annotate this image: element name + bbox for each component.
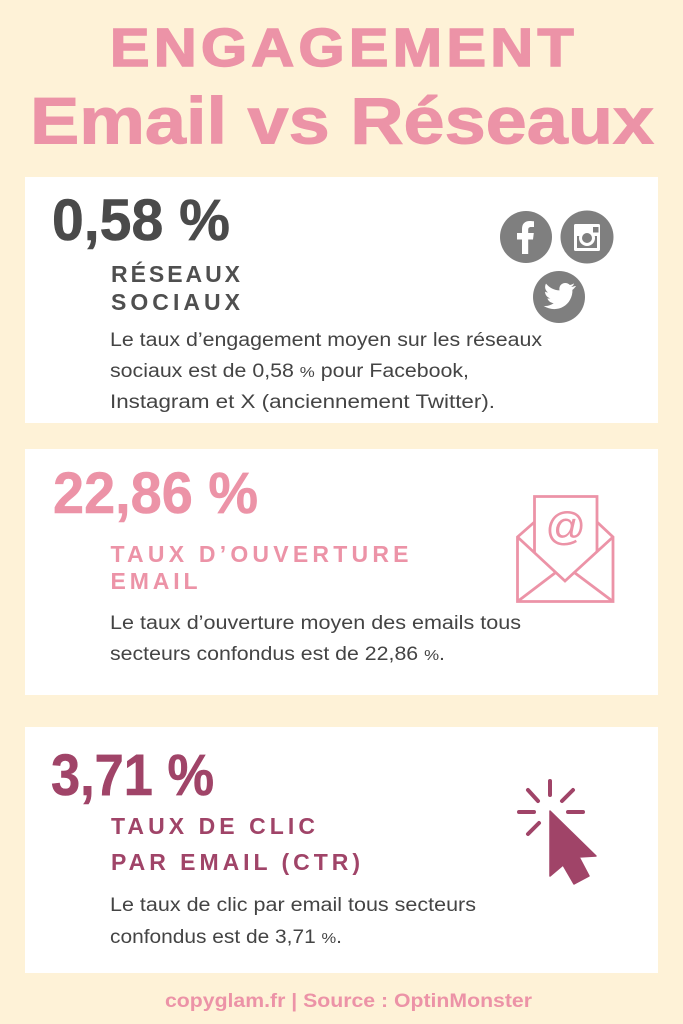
title: Email vs Réseaux <box>30 84 654 158</box>
text block: social description <box>110 330 543 413</box>
icon: envelope: @ <box>545 505 585 549</box>
stat: 0,58 %: 0,58 % <box>52 188 230 253</box>
heading: taux de clic par email <box>111 813 360 875</box>
heading: taux de clic par email: TAUX DE CLIC <box>111 813 315 839</box>
heading: taux d'ouverture email <box>110 541 408 594</box>
text block: click rate description: confondus est de 3,71 %. <box>110 927 342 948</box>
icon: envelope <box>518 496 613 602</box>
text block: click rate description <box>110 895 476 948</box>
panel: social networks <box>25 177 658 423</box>
icon: twitter <box>533 271 585 323</box>
title: ENGAGEMENT <box>110 18 578 78</box>
heading: réseaux sociaux <box>111 260 241 315</box>
text block: click rate description: Le taux de clic par email tous secteurs <box>110 895 476 916</box>
text block: open rate description: Le taux d’ouverture moyen des emails tous <box>110 613 521 634</box>
icon: cursor <box>519 781 596 884</box>
icon: instagram <box>560 210 614 264</box>
text block: open rate description <box>110 613 521 665</box>
text block: social description: Le taux d’engagement moyen sur les réseaux <box>110 330 543 351</box>
text block: open rate description: secteurs confondus est de 22,86 %. <box>110 644 445 665</box>
footer source: copyglam.fr | Source : OptinMonster <box>165 991 533 1012</box>
title <box>30 18 654 158</box>
panel: email open rate <box>25 449 658 695</box>
heading: taux d'ouverture email: EMAIL <box>110 568 198 594</box>
heading: taux d'ouverture email: TAUX D’OUVERTURE <box>110 541 408 567</box>
heading: réseaux sociaux: SOCIAUX <box>111 289 241 315</box>
text block: social description: sociaux est de 0,58 % pour Facebook, <box>110 361 469 382</box>
stat: 22,86 %: 22,86 % <box>53 461 258 526</box>
text block: social description: Instagram et X (anciennement Twitter). <box>110 392 495 413</box>
panel: click rate <box>25 727 658 973</box>
heading: réseaux sociaux: RÉSEAUX <box>111 260 241 287</box>
stat: 3,71 %: 3,71 % <box>51 743 214 808</box>
heading: taux de clic par email: PAR EMAIL (CTR) <box>111 849 360 875</box>
icon: facebook <box>500 211 552 263</box>
